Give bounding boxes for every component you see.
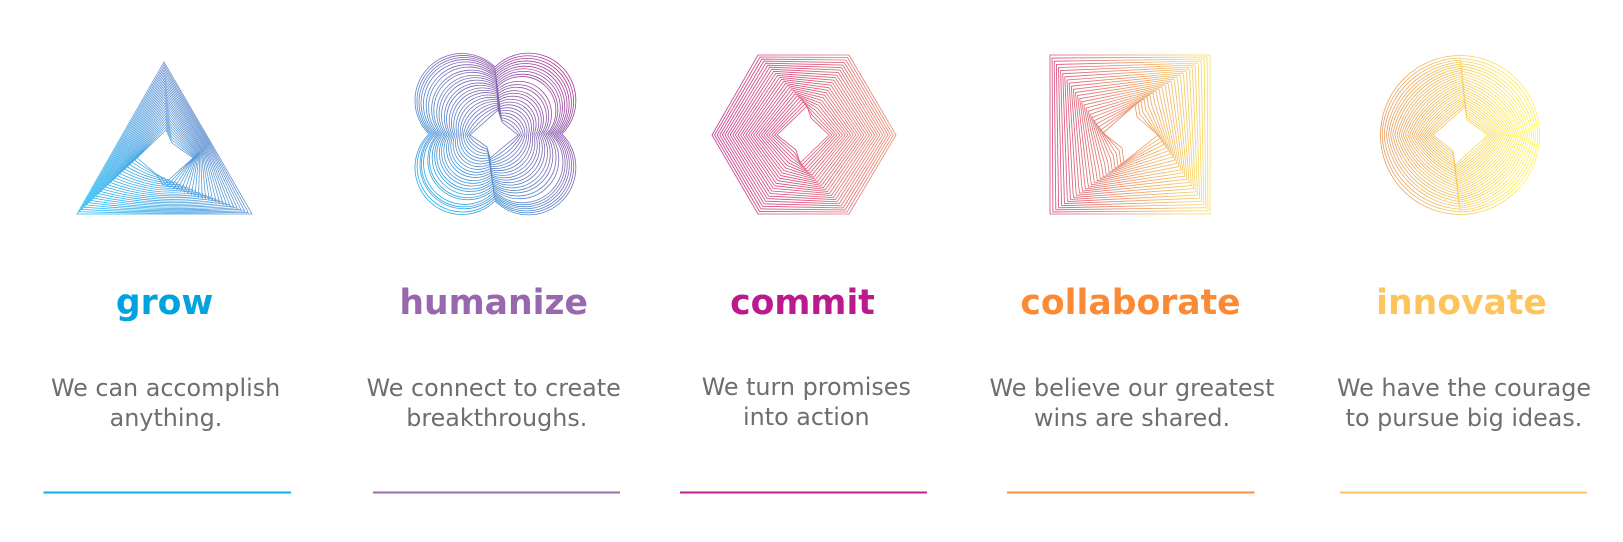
- rule: commit: [680, 492, 927, 494]
- panel: collaborate: [990, 55, 1274, 492]
- rule: innovate: [1340, 492, 1587, 494]
- text: innovate description: We have the courage: [1337, 374, 1591, 402]
- text: humanize description: We connect to create: [367, 374, 621, 402]
- panel: humanize: [367, 53, 621, 493]
- heading: collaborate: collaborate: [1020, 283, 1241, 323]
- rule: humanize: [373, 492, 620, 494]
- text: collaborate description: wins are shared.: [1034, 404, 1230, 432]
- panel: grow: [44, 62, 291, 492]
- heading: innovate: innovate: [1376, 283, 1547, 323]
- text: commit description: We turn promises: [702, 373, 911, 401]
- icon: line-art hexagon: [712, 55, 896, 214]
- icon: line-art circle: [1380, 56, 1540, 214]
- text: commit description: into action: [743, 403, 870, 431]
- heading: humanize: humanize: [399, 283, 588, 323]
- text: grow description: We can accomplish: [51, 374, 280, 402]
- panel: innovate: [1337, 56, 1591, 492]
- panel: commit: [680, 55, 927, 492]
- text: innovate description: to pursue big ideas.: [1346, 404, 1582, 432]
- text: grow description: anything.: [110, 404, 222, 432]
- heading: grow: grow: [116, 283, 213, 323]
- icon: line-art triangle: [77, 62, 252, 214]
- rule: collaborate: [1007, 492, 1254, 494]
- text: collaborate description: We believe our greatest: [990, 374, 1274, 402]
- heading: commit: commit: [730, 283, 875, 323]
- icon: line-art square: [1050, 55, 1210, 214]
- text: humanize description: breakthroughs.: [406, 404, 587, 432]
- rule: grow: [44, 492, 291, 494]
- icon: line-art clover: [415, 53, 576, 215]
